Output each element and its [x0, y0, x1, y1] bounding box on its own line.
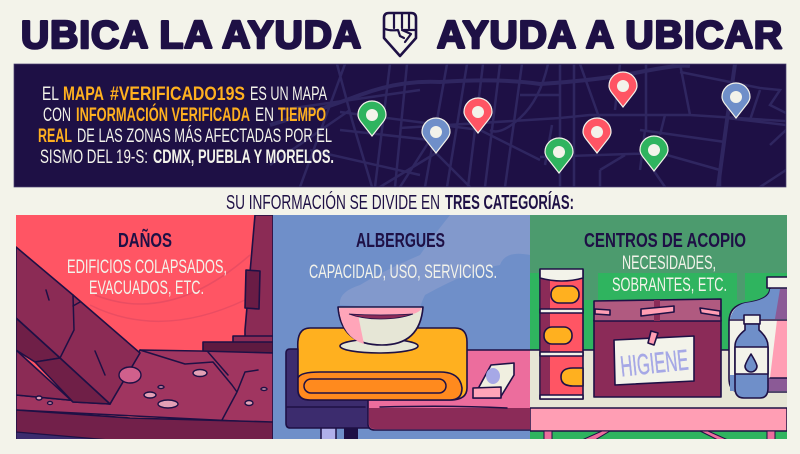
soap: [473, 363, 514, 398]
collapsed slab: [16, 247, 258, 420]
ground: [16, 350, 273, 423]
label: centros de acopio: NECESIDADES,: [622, 252, 716, 274]
intro text: #VERIFICADO19S: [110, 84, 245, 105]
intro text: DE LAS ZONAS MÁS AFECTADAS POR EL: [77, 126, 332, 147]
intro text: CDMX, PUEBLA Y MORELOS.: [153, 147, 334, 168]
label: centros de acopio: SOBRANTES, ETC.: [612, 274, 727, 296]
label: daños: DAÑOS: [118, 229, 172, 252]
label: centros de acopio: [584, 233, 746, 294]
intro text: REAL: [38, 126, 72, 147]
intro text: EN: [255, 105, 274, 126]
subheading: SU INFORMACIÓN SE DIVIDE EN: [226, 191, 440, 214]
label: albergues: ALBERGUES: [356, 229, 445, 252]
map pins: [358, 72, 750, 173]
subheading: TRES CATEGORÍAS:: [445, 191, 574, 214]
label: daños: EVACUADOS, ETC.: [89, 277, 204, 299]
intro text: INFORMACIÓN VERIFICADA: [76, 104, 250, 126]
label: daños: [67, 229, 227, 299]
map roads: [270, 64, 800, 187]
panel: map: [14, 64, 800, 187]
title: UBICA LA AYUDA: [21, 14, 361, 57]
intro text: CON: [43, 105, 71, 126]
wall and steps: [203, 215, 273, 353]
cans: [540, 269, 583, 399]
intro text: ES UN MAPA: [250, 84, 327, 105]
title: AYUDA A UBICAR: [437, 14, 782, 57]
bowl: [338, 307, 423, 353]
intro text: SISMO DEL 19-S:: [40, 147, 148, 168]
label: albergues: [310, 233, 496, 280]
intro text: MAPA: [63, 84, 104, 105]
label: higiene: HIGIENE: [619, 345, 690, 383]
icon: raised fist shield: [384, 13, 416, 56]
stones: [36, 367, 267, 408]
panel: daños: [16, 215, 273, 445]
panel: albergues: [273, 215, 532, 441]
panel: centros de acopio: [530, 215, 790, 440]
table and legs: [286, 349, 532, 441]
title: [21, 14, 782, 57]
label: centros de acopio: CENTROS DE ACOPIO: [584, 229, 746, 252]
intro text: [38, 84, 334, 168]
jug and bottle: [729, 277, 790, 398]
intro text: EL: [42, 84, 59, 105]
box: [594, 299, 721, 397]
folded blanket: [298, 328, 467, 400]
label: higiene: [614, 331, 694, 385]
label: albergues: CAPACIDAD, USO, SERVICIOS.: [309, 261, 497, 283]
table: [530, 350, 787, 440]
intro text: TIEMPO: [278, 105, 326, 126]
label: daños: EDIFICIOS COLAPSADOS,: [67, 256, 227, 278]
